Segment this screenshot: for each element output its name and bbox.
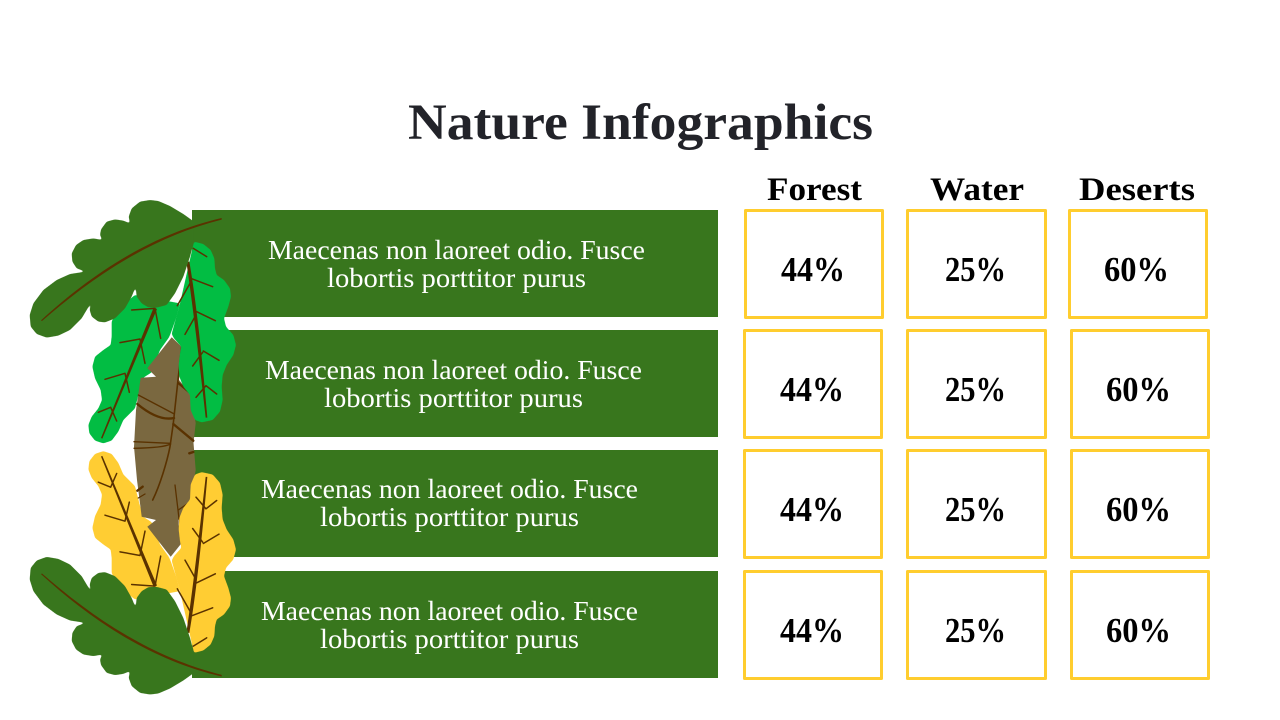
value boxes: row 2	[744, 330, 1208, 438]
text block: row 2: Maecenas non laoreet odio. Fusce	[265, 355, 642, 385]
illustration: leaves and trunk	[30, 200, 236, 694]
icon: bottom dark green leaf	[30, 557, 222, 694]
header: Water: Water	[930, 172, 1024, 208]
value boxes: row 3: 60%	[1106, 490, 1171, 529]
header: Deserts: Deserts	[1079, 172, 1195, 208]
text block: row 4: Maecenas non laoreet odio. Fusce	[261, 596, 638, 626]
header: Forest: Forest	[767, 172, 862, 208]
icon: left yellow leaf	[88, 451, 180, 599]
icon: right yellow leaf	[172, 472, 236, 653]
value boxes: row 1: 60%	[1104, 250, 1169, 289]
text block: row 1: lobortis porttitor purus	[327, 263, 586, 293]
value boxes: row 4	[744, 572, 1208, 678]
value boxes: row 3: 44%	[780, 490, 844, 529]
value boxes: row 3	[744, 450, 1208, 558]
value boxes: row 2: 44%	[780, 370, 844, 409]
text block: row 4: lobortis porttitor purus	[320, 624, 579, 654]
panel: row 4 bar	[192, 571, 718, 678]
column headers	[767, 172, 1195, 208]
text block: row 3: lobortis porttitor purus	[320, 502, 579, 532]
icon: left green leaf	[88, 295, 180, 443]
value boxes: row 1: 44%	[781, 250, 845, 289]
text block: row 3: Maecenas non laoreet odio. Fusce	[261, 474, 638, 504]
value boxes: row 2: 25%	[945, 370, 1006, 409]
title: Nature Infographics	[408, 95, 873, 151]
icon: right green leaf	[172, 242, 236, 422]
panel: row 1 bar	[192, 210, 718, 317]
text block: row 1: Maecenas non laoreet odio. Fusce	[268, 235, 645, 265]
value boxes: row 3: 25%	[945, 490, 1006, 529]
value boxes: row 4: 60%	[1106, 611, 1171, 650]
value boxes: row 2: 60%	[1106, 370, 1171, 409]
panel: row 3 bar	[192, 450, 718, 557]
icon: tree trunk	[134, 337, 196, 557]
text block: row 2: lobortis porttitor purus	[324, 383, 583, 413]
value boxes: row 1: 25%	[945, 250, 1006, 289]
icon: top dark green leaf	[30, 200, 222, 338]
value boxes: row 4: 25%	[945, 611, 1006, 650]
value boxes: row 1	[746, 210, 1206, 318]
value boxes: row 4: 44%	[780, 611, 844, 650]
panel: row 2 bar	[192, 330, 718, 437]
